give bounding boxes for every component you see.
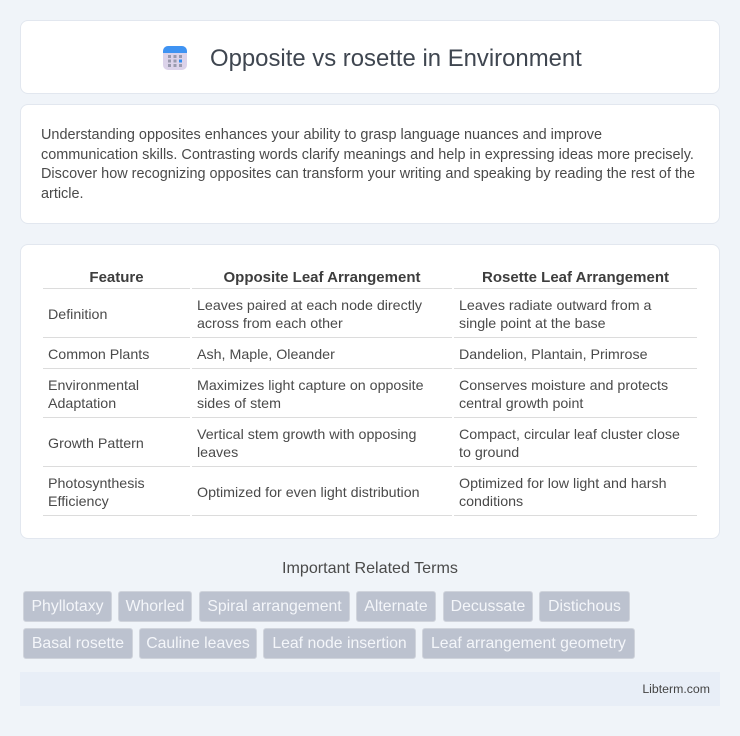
- row: Photosynthesis Efficiency: Optimized for even light distribution: [197, 485, 420, 501]
- row: Environmental Adaptation: Maximizes light capture on opposite: [197, 378, 424, 394]
- icon: calendar: [163, 46, 187, 70]
- intro text: communication skills. Contrasting words clarify meanings and help in expressing ideas more precisely.: [41, 146, 694, 162]
- row: Growth Pattern: Compact, circular leaf cluster close: [459, 427, 680, 443]
- row: Environmental Adaptation: [48, 378, 668, 412]
- row: Common Plants: Dandelion, Plantain, Primrose: [459, 347, 648, 363]
- row: Photosynthesis Efficiency: Photosynthesis: [48, 476, 145, 492]
- intro panel: [20, 104, 720, 224]
- row: Common Plants: Ash, Maple, Oleander: [197, 347, 335, 363]
- row: Definition: across from each other: [197, 316, 343, 332]
- related terms tags: [23, 591, 635, 659]
- intro text: [41, 127, 695, 202]
- related terms tags: Spiral arrangement: [207, 598, 342, 615]
- row: Photosynthesis Efficiency: [48, 476, 667, 510]
- row: Growth Pattern: Growth Pattern: [48, 436, 144, 452]
- related terms tags: Whorled: [126, 598, 184, 615]
- row: Photosynthesis Efficiency: Efficiency: [48, 494, 109, 510]
- related terms tags: Distichous: [548, 598, 621, 615]
- row: Photosynthesis Efficiency: conditions: [459, 494, 523, 510]
- row: Growth Pattern: Vertical stem growth with opposing: [197, 427, 416, 443]
- intro text: article.: [41, 186, 84, 202]
- table header: Opposite Leaf Arrangement: Opposite Leaf Arrangement: [224, 269, 420, 286]
- footer credit: Libterm.com: [642, 682, 710, 696]
- related terms heading: Important Related Terms: [282, 559, 458, 577]
- intro text: Discover how recognizing opposites can transform your writing and speaking by reading the rest of the: [41, 166, 695, 182]
- row: Environmental Adaptation: Adaptation: [48, 396, 116, 412]
- row: Environmental Adaptation: central growth point: [459, 396, 583, 412]
- header panel: [20, 20, 720, 94]
- row: Growth Pattern: to ground: [459, 445, 519, 461]
- row: Common Plants: Common Plants: [48, 347, 149, 363]
- row: Growth Pattern: [48, 427, 680, 461]
- row: Definition: Leaves radiate outward from a: [459, 298, 651, 314]
- row: Definition: single point at the base: [459, 316, 606, 332]
- row: Definition: Leaves paired at each node directly: [197, 298, 422, 314]
- row: Definition: Definition: [48, 307, 107, 323]
- row: Environmental Adaptation: Conserves moisture and protects: [459, 378, 668, 394]
- related terms tags: Phyllotaxy: [32, 598, 104, 615]
- row: Photosynthesis Efficiency: Optimized for low light and harsh: [459, 476, 667, 492]
- row: Environmental Adaptation: Environmental: [48, 378, 139, 394]
- row: Environmental Adaptation: sides of stem: [197, 396, 281, 412]
- row: Common Plants: [48, 347, 648, 363]
- related terms tags: Decussate: [451, 598, 525, 615]
- row: Definition: [48, 298, 652, 332]
- row: Growth Pattern: leaves: [197, 445, 238, 461]
- intro text: Understanding opposites enhances your ability to grasp language nuances and improve: [41, 127, 602, 143]
- comparison table panel: [20, 244, 720, 539]
- related terms tags: Leaf node insertion: [272, 635, 407, 652]
- related terms tags: Cauline leaves: [146, 635, 250, 652]
- title: Opposite vs rosette in Environment: [210, 45, 582, 72]
- related terms tags: Alternate: [364, 598, 428, 615]
- table header: Feature: Feature: [89, 269, 144, 286]
- table header: Rosette Leaf Arrangement: Rosette Leaf Arrangement: [482, 269, 669, 286]
- related terms tags: Basal rosette: [32, 635, 124, 652]
- related terms tags: Leaf arrangement geometry: [431, 635, 626, 652]
- footer bar: [20, 672, 720, 706]
